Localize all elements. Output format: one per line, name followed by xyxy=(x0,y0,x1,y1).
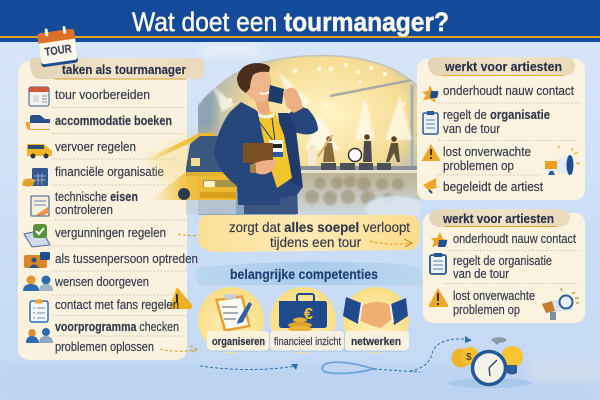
list: problemen op xyxy=(443,159,514,173)
calendar badge: TOUR: TOUR xyxy=(44,43,73,59)
icon: two people talking xyxy=(23,276,53,291)
lanyard xyxy=(257,118,275,142)
dashed flight path with loop xyxy=(200,362,420,373)
folder xyxy=(243,143,273,163)
competence: netwerken xyxy=(343,287,409,353)
jacket body xyxy=(214,102,302,205)
list: lost onverwachte xyxy=(453,289,535,303)
icon: calculator and coins xyxy=(22,168,48,186)
list: van de tour xyxy=(453,267,509,281)
badge xyxy=(269,140,283,157)
calendar badge: TOUR xyxy=(37,25,78,67)
icon: clipboard xyxy=(430,253,446,274)
heading band xyxy=(195,262,422,285)
icon: mediator with speech bubble xyxy=(24,252,50,268)
concert scene illustration xyxy=(195,50,426,220)
task list: vervoer regelen xyxy=(55,140,136,154)
panel: werkt voor artiesten (onder) xyxy=(423,209,585,323)
competence: financieel inzicht: € xyxy=(304,306,313,323)
dividers xyxy=(444,250,580,284)
heading band: belangrijke competenties xyxy=(230,267,378,282)
panel: werkt voor artiesten (boven) xyxy=(417,57,585,200)
task list: financiële organisatie xyxy=(55,165,164,179)
task list: voorprogramma checken xyxy=(55,320,179,334)
competence labels: netwerken xyxy=(351,336,401,348)
callout: zorgt dat alles soepel verloopt: zorgt dat alles soepel verloopt xyxy=(229,220,410,235)
icon: permit with check xyxy=(24,224,50,247)
task list: tour voorbereiden xyxy=(55,88,150,102)
hand on phone xyxy=(283,88,303,113)
competence: organiseren xyxy=(198,287,264,353)
band on stage xyxy=(308,134,400,165)
section heading band: taken als tourmanager xyxy=(62,62,186,77)
icon: bed xyxy=(26,115,50,130)
yellow shirt xyxy=(258,112,292,188)
heading band: werkt voor artiesten xyxy=(442,211,554,226)
icon: star with speech bubble xyxy=(431,232,448,247)
panel: taken als tourmanager xyxy=(18,25,204,360)
dashed arrow: vergunningen xyxy=(178,229,216,235)
list xyxy=(453,232,576,317)
competence: financieel inzicht xyxy=(270,287,336,353)
callout: zorgt dat alles soepel verloopt: tijdens een tour xyxy=(270,235,361,250)
icon: van xyxy=(27,144,52,158)
competence labels xyxy=(207,331,409,352)
list: begeleidt de artiest xyxy=(443,180,543,194)
icon: small megaphone xyxy=(423,176,440,193)
task list: accommodatie boeken xyxy=(55,114,172,128)
icon: clipboard xyxy=(30,300,48,322)
dashed arrow: problemen xyxy=(160,346,197,353)
tour manager figure xyxy=(214,63,318,214)
dividers xyxy=(436,103,580,175)
heading band xyxy=(428,57,575,76)
tour bus xyxy=(145,131,240,214)
list: regelt de organisatie xyxy=(443,108,550,122)
header banner xyxy=(0,0,600,42)
competence labels: financieel inzicht xyxy=(274,336,341,348)
icon: megaphone xyxy=(542,288,579,320)
icon: two people xyxy=(26,328,53,343)
callout: zorgt dat alles soepel verloopt xyxy=(198,215,420,252)
task list xyxy=(54,88,198,354)
list: onderhoudt nauw contact xyxy=(453,232,576,246)
task list: vergunningen regelen xyxy=(55,226,166,240)
icon: warning triangle xyxy=(169,287,192,309)
list: regelt de organisatie xyxy=(453,254,552,268)
task list: wensen doorgeven xyxy=(54,275,149,289)
icon: warning xyxy=(422,144,440,161)
list: onderhoudt nauw contact xyxy=(443,84,574,98)
competence labels: organiseren xyxy=(212,336,265,348)
right arm raised xyxy=(286,106,318,134)
task list: technische eisen xyxy=(55,190,138,204)
heading band: werkt voor artiesten xyxy=(444,59,562,74)
list: problemen op xyxy=(453,303,520,317)
dividers xyxy=(52,108,188,336)
title: Wat doet een tourmanager? xyxy=(132,7,449,37)
phone xyxy=(268,85,284,104)
section: belangrijke competenties xyxy=(195,262,422,353)
task list: problemen oplossen xyxy=(55,340,154,354)
task list: contact met fans regelen xyxy=(55,298,179,312)
icon: stopwatch with coin and light bulb xyxy=(448,337,532,388)
section heading band xyxy=(30,58,204,79)
dashed arrow to stopwatch xyxy=(410,336,472,371)
neck xyxy=(253,96,270,115)
icon: megaphone xyxy=(545,146,580,176)
lower hand xyxy=(250,160,276,174)
icon: warning xyxy=(429,288,448,307)
list xyxy=(443,84,574,194)
trousers xyxy=(244,186,298,214)
task list: als tussenpersoon optreden xyxy=(55,252,198,266)
icon: clipboard xyxy=(423,111,438,134)
list: lost onverwachte xyxy=(443,145,531,159)
task list: controleren xyxy=(55,203,113,217)
icon: calendar xyxy=(29,87,49,106)
list: van de tour xyxy=(443,122,500,136)
icon: checklist and pen xyxy=(31,196,49,216)
icon: star with speech bubble xyxy=(422,85,439,103)
icon: stopwatch with coin and light bulb: $ xyxy=(466,352,472,363)
face xyxy=(244,70,271,102)
smile xyxy=(260,92,269,94)
hair xyxy=(237,63,270,93)
